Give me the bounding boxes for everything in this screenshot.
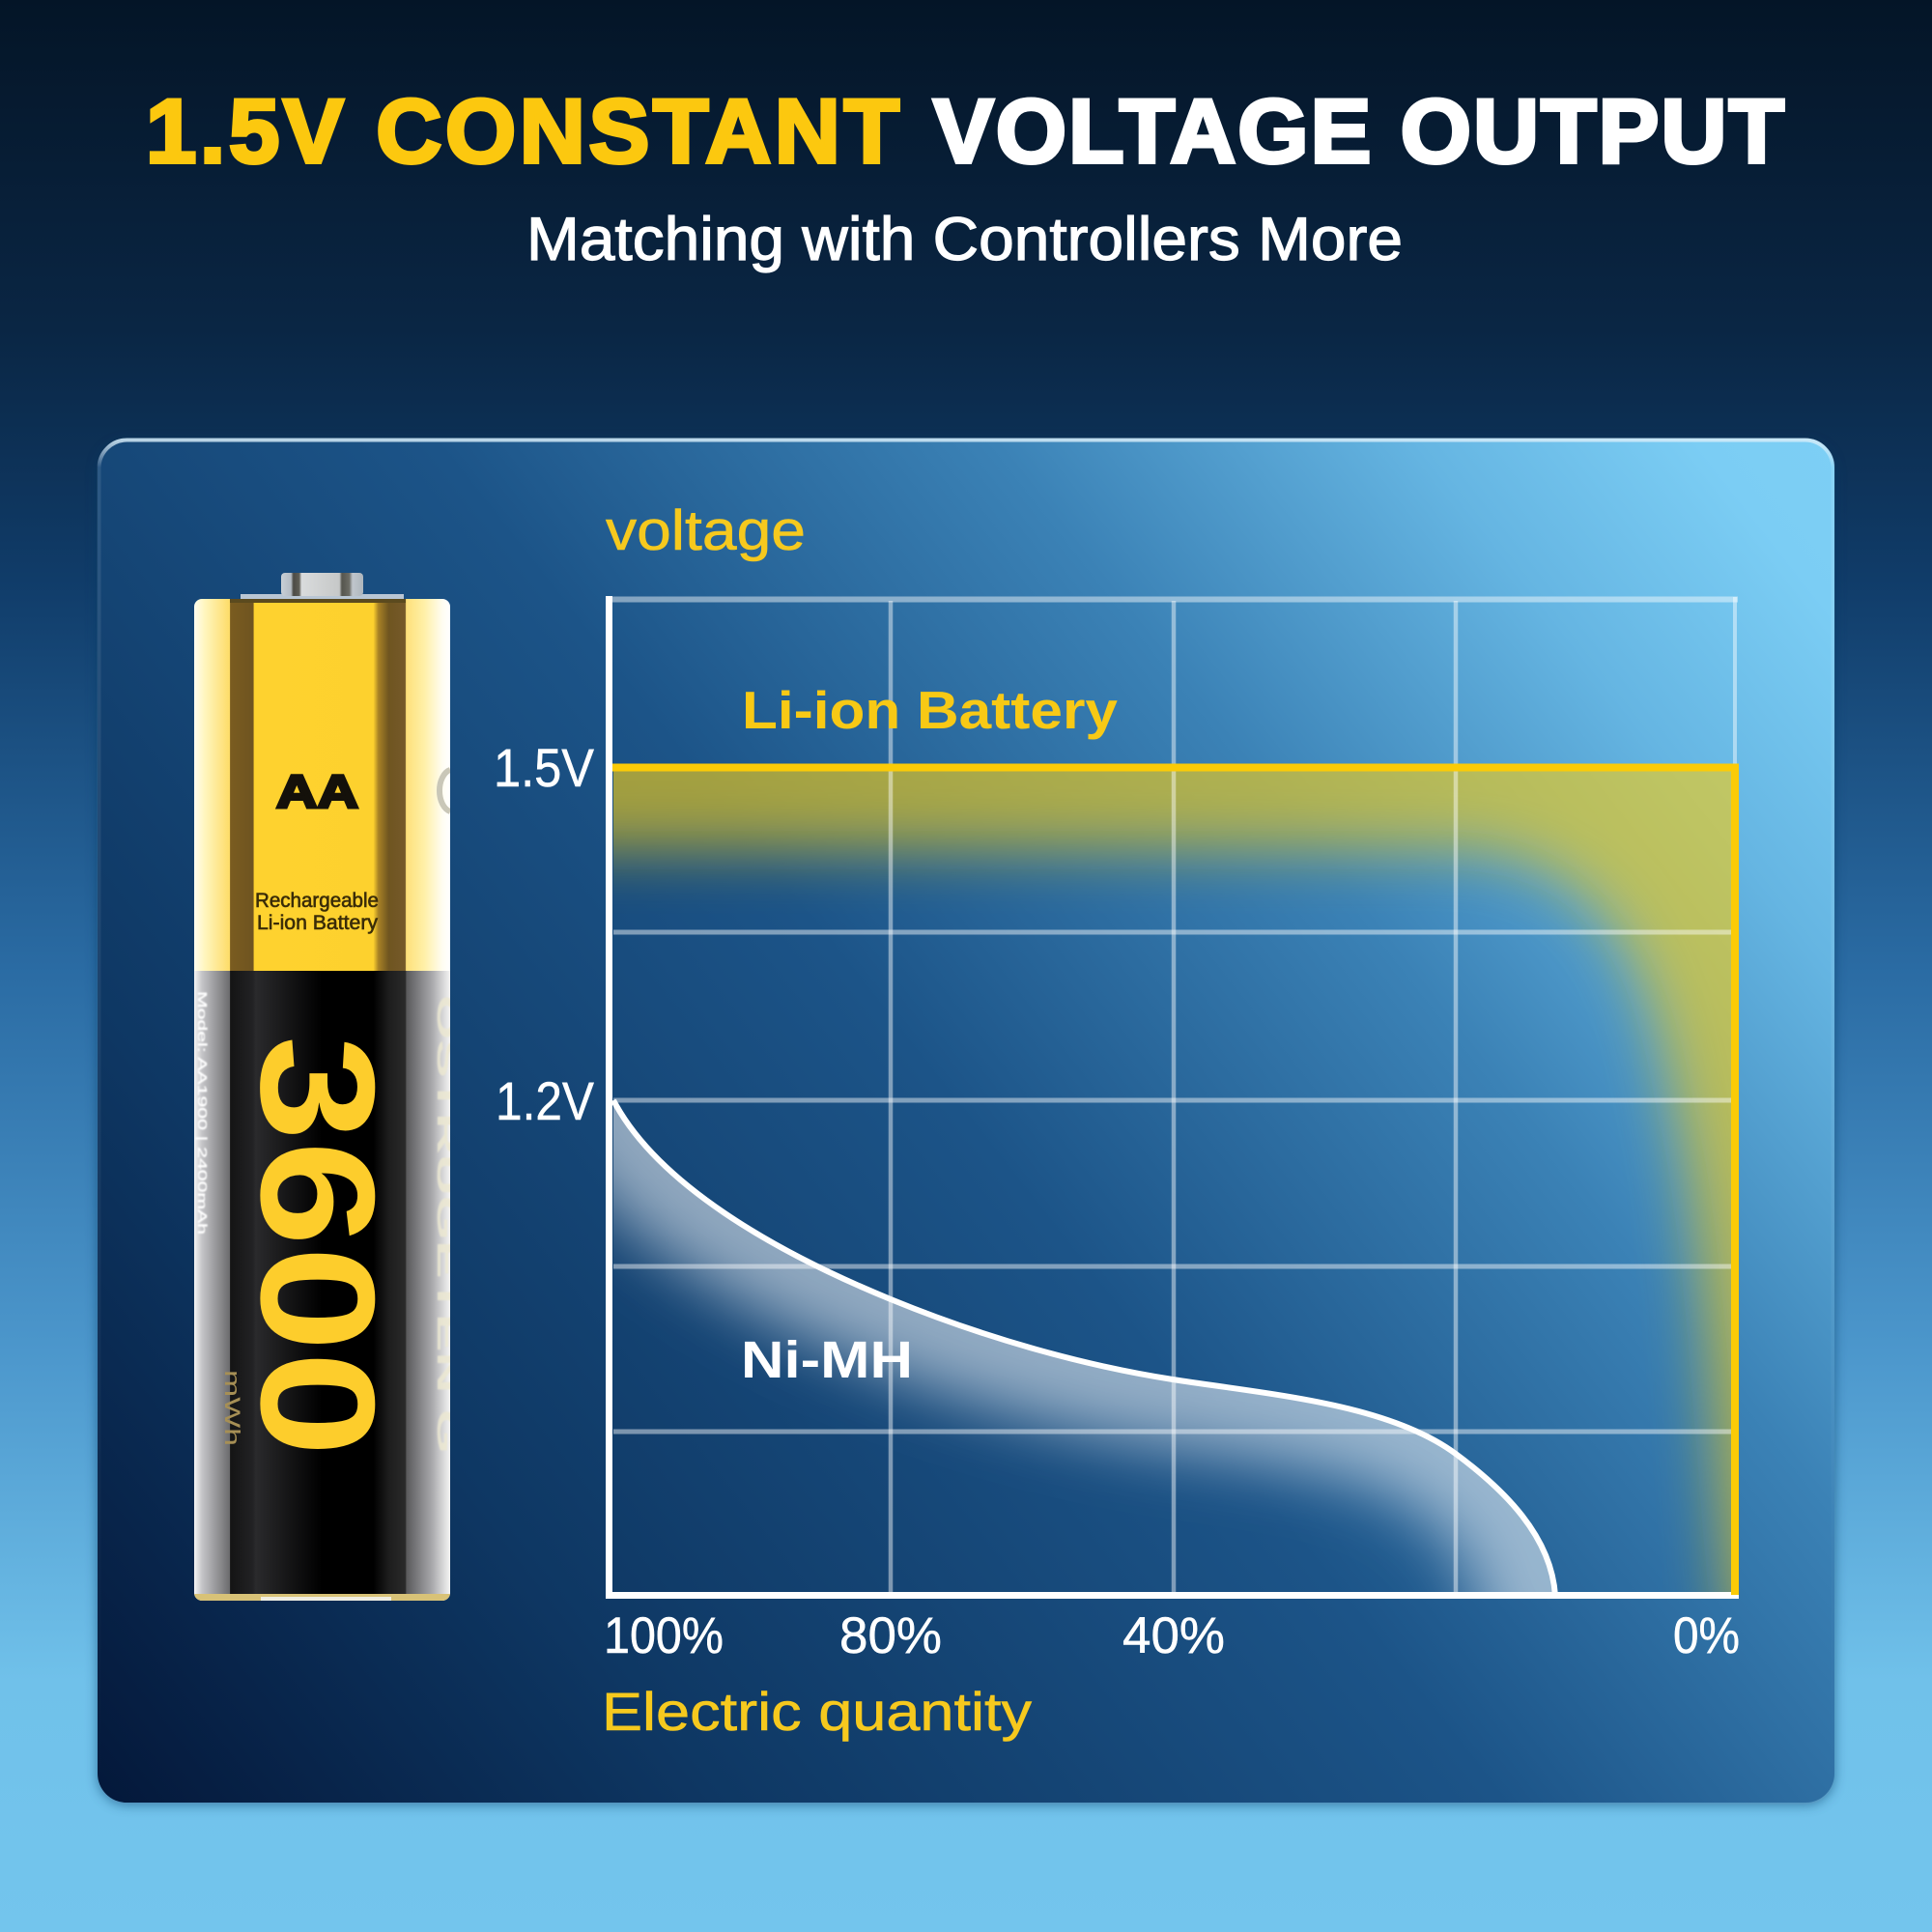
panel: chart card — [98, 439, 1884, 1804]
label: Li-ion Battery: Li-ion Battery — [742, 680, 1118, 740]
brand text on battery edge: OSTRUGETEN G — [432, 995, 461, 1454]
model text on battery edge: Model: AA1900 | 2400mAh — [195, 991, 210, 1235]
quantity ticks — [604, 1607, 1740, 1664]
grid lines — [611, 597, 1738, 1594]
title: VOLTAGE OUTPUT — [933, 80, 1784, 182]
voltage axis — [606, 596, 612, 1599]
quantity axis — [606, 1592, 1739, 1599]
quantity ticks: 40% — [1122, 1607, 1225, 1664]
quantity ticks: 0% — [1673, 1607, 1740, 1664]
axis title: voltage: voltage — [606, 499, 806, 562]
Li-ion line — [612, 767, 1735, 1595]
battery illustration — [194, 573, 461, 1601]
label: 1.5V: 1.5V — [494, 737, 595, 798]
quantity ticks: 80% — [839, 1607, 942, 1664]
title: 1.5V CONSTANT — [146, 80, 899, 182]
battery cap — [241, 573, 404, 600]
chart — [497, 596, 1739, 1654]
quantity ticks: 100% — [604, 1607, 724, 1664]
Ni-MH line — [613, 1100, 1555, 1596]
title — [146, 80, 1784, 182]
battery description: Rechargeable — [255, 890, 379, 912]
AA label: AA — [276, 767, 358, 818]
battery body — [194, 599, 461, 1601]
unit mWh: mWh — [220, 1370, 244, 1446]
subtitle: Matching with Controllers More — [526, 206, 1403, 273]
capacity 3600: 3600 — [227, 1036, 409, 1457]
Li-ion area — [613, 771, 1731, 1592]
axis title: Electric quantity: Electric quantity — [602, 1681, 1032, 1742]
battery description — [255, 890, 379, 934]
Ni-MH area — [613, 1107, 1551, 1592]
battery description: Li-ion Battery — [257, 912, 378, 934]
label: Ni-MH: Ni-MH — [741, 1331, 913, 1389]
label: 1.2V: 1.2V — [496, 1070, 595, 1131]
